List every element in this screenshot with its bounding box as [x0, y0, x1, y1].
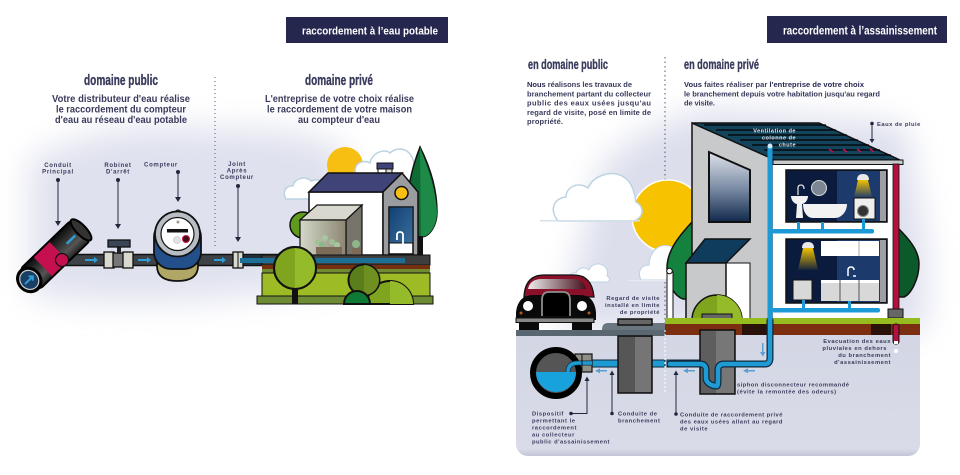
- soil panel: [516, 335, 920, 456]
- lower room: [786, 239, 887, 303]
- arrow: robinet: [115, 178, 121, 229]
- bath: [803, 204, 847, 218]
- background glow: sewer: [560, 110, 925, 330]
- gable: [383, 173, 418, 255]
- text block: domaine public: d'eau au réseau d'eau potable: [55, 115, 187, 126]
- title banner: eau potable: raccordement à l’eau potable: [302, 26, 438, 38]
- text block: public: branchement partant du collecteur: [527, 89, 651, 98]
- heading: en domaine public: en domaine public: [528, 56, 608, 72]
- arrow: joint: [235, 184, 241, 242]
- mirror: [812, 180, 826, 196]
- greenhouse: [346, 205, 362, 255]
- leader: dispositif: [569, 376, 590, 415]
- appliance: [793, 280, 812, 300]
- pipe tee connection: [56, 254, 68, 266]
- lower cabinets: [821, 280, 879, 301]
- arrow: compteur: [175, 170, 181, 202]
- label: ventilation: [753, 128, 796, 148]
- valve: [104, 240, 133, 268]
- text block: privé: le branchement depuis votre habitation jusqu'au regard: [684, 89, 880, 98]
- text block: domaine privé: [265, 94, 414, 126]
- label: robinet d'arrêt: [104, 163, 132, 176]
- label: dispositif: au collecteur: [532, 432, 575, 438]
- small house scene: [240, 147, 437, 304]
- sink: [791, 196, 808, 218]
- joint: [233, 252, 243, 268]
- main pipe: [11, 216, 94, 299]
- vent stack and floor drains: [768, 144, 880, 320]
- label: dispositif: raccordement: [532, 426, 577, 432]
- water pipe: [62, 245, 405, 266]
- lamp: [802, 242, 814, 248]
- round tree: [292, 285, 298, 304]
- flow arrows: [85, 257, 226, 263]
- roof: [309, 173, 402, 192]
- label: eaux de pluie: Eaux de pluie: [877, 122, 921, 128]
- label: robinet d'arrêt: Robinet: [104, 163, 132, 169]
- upper cabinets: [821, 241, 879, 256]
- siphon chamber: [700, 330, 735, 394]
- flow arrows sewer: [595, 343, 766, 373]
- label: joint après compteur: Compteur: [220, 175, 254, 181]
- arrow: eaux de pluie: [870, 122, 874, 143]
- label: ventilation: Ventilation de: [753, 128, 796, 134]
- text block: privé: [684, 80, 880, 108]
- upper room: [786, 170, 887, 222]
- walls: [309, 192, 383, 255]
- label: conduit principal: [42, 163, 74, 176]
- ground: [262, 255, 430, 265]
- text block: public: regard de visite, posé en limite de: [527, 108, 651, 117]
- label: dispositif: Dispositif: [532, 412, 564, 418]
- big cloud: [553, 174, 642, 221]
- text block: domaine public: Votre distributeur d'eau réalise: [52, 94, 190, 105]
- label: conduite de raccordement privé: des eaux usées allant au regard: [680, 420, 783, 426]
- label: siphon: siphon disconnecteur recommandé: [737, 382, 850, 388]
- label: regard de visite: installé en limite: [605, 303, 660, 309]
- label: joint après compteur: Après: [227, 168, 247, 174]
- collector pipe to manhole: [592, 360, 705, 367]
- heading: en domaine privé: en domaine privé: [684, 56, 759, 72]
- label: conduit principal: Conduit: [44, 163, 72, 169]
- interior wall: [772, 160, 894, 320]
- road and pavement: [516, 323, 665, 336]
- car: [516, 275, 596, 330]
- label: dispositif: permettant le: [532, 418, 576, 424]
- label: ventilation: chute: [779, 142, 796, 148]
- cloud behind house: [639, 245, 679, 280]
- siphon and drains: [670, 320, 770, 386]
- annex building: [686, 239, 750, 320]
- left tree: [667, 222, 693, 299]
- heading: domaine public: domaine public: [84, 73, 158, 89]
- text block: public: public des eaux usées jusqu'au: [527, 99, 651, 108]
- big house: [692, 123, 903, 320]
- text block: domaine public: le raccordement du compteur: [56, 104, 186, 116]
- tall tree: [408, 147, 437, 237]
- label: conduit principal: Principal: [42, 170, 74, 176]
- label: evacuation: du branchement: [838, 353, 891, 359]
- label: evacuation: pluviales en dehors: [822, 346, 887, 352]
- washing machine: [854, 198, 875, 219]
- text block: privé: de visite.: [684, 99, 715, 108]
- heading: domaine privé: domaine privé: [305, 73, 373, 89]
- text block: privé: Vous faites réaliser par l'entreprise de votre choix: [684, 80, 865, 89]
- title banner: eau potable: [286, 17, 448, 43]
- bush large: [367, 281, 413, 304]
- text block: public: Nous réalisons les travaux de: [527, 80, 632, 89]
- gutter: [773, 160, 903, 164]
- label: dispositif: public d'assainissement: [532, 440, 610, 446]
- door: [389, 207, 413, 254]
- text block: domaine privé: au compteur d'eau: [298, 115, 380, 126]
- pole: [667, 268, 673, 322]
- label: evacuation: d'assainissement: [834, 360, 891, 366]
- text block: domaine privé: le raccordement de votre maison: [267, 104, 412, 116]
- text block: public: propriété.: [527, 117, 563, 126]
- rain pipe: [893, 164, 899, 310]
- label: conduite de raccordement privé: Conduite de raccordement privé: [680, 412, 783, 418]
- water meter: [154, 210, 201, 281]
- garden ground: [665, 318, 920, 335]
- sun: [632, 180, 704, 252]
- title banner: assainissement: raccordement à l’assainissement: [783, 26, 937, 38]
- label: robinet d'arrêt: D'arrêt: [106, 170, 130, 176]
- label: joint après compteur: Joint: [228, 162, 246, 168]
- cloud left: [284, 178, 325, 199]
- label: compteur: Compteur: [144, 162, 178, 168]
- label: conduite de branchement: Conduite de: [618, 412, 658, 418]
- label: ventilation: colonne de: [762, 136, 796, 142]
- label: regard de visite: de propriété: [620, 310, 660, 316]
- label: siphon: [737, 382, 850, 396]
- right tree: [896, 228, 919, 297]
- label: joint après compteur: [220, 162, 254, 181]
- bush behind house: [290, 212, 316, 238]
- text block: domaine privé: L'entreprise de votre choix réalise: [265, 94, 414, 105]
- label: siphon: (évite la remontée des odeurs): [737, 390, 836, 396]
- manhole: [618, 336, 652, 393]
- label: conduite de branchement: [618, 412, 660, 424]
- label: regard de visite: Regard de visite: [606, 296, 660, 302]
- chimney: [377, 163, 393, 169]
- label: evacuation: Evacuation des eaux: [823, 339, 891, 345]
- faucet: [848, 267, 856, 276]
- small cloud: [569, 264, 609, 282]
- cloud right: [355, 149, 414, 183]
- lamp: [857, 174, 869, 180]
- text block: public: [527, 80, 651, 126]
- label: dispositif: [532, 412, 610, 446]
- bush small: [344, 291, 370, 304]
- title banner: assainissement: [767, 16, 947, 43]
- label: conduite de branchement: branchement: [618, 418, 660, 424]
- bush mid: [348, 264, 380, 296]
- label: regard de visite: [605, 296, 660, 316]
- leader: branchement: [610, 370, 614, 415]
- arrow: conduit principal: [55, 178, 61, 226]
- label: conduite de raccordement privé: de visite: [680, 426, 708, 432]
- background glow: drinking water: [30, 126, 345, 302]
- manhole lid: [618, 319, 652, 325]
- leader: raccordement privé: [674, 370, 678, 416]
- text block: domaine public: [52, 94, 190, 126]
- label: evacuation: [822, 339, 891, 366]
- side wall: [692, 123, 772, 320]
- sun: [327, 147, 363, 183]
- collector: [533, 350, 592, 396]
- storm drain outlet: [893, 324, 899, 353]
- label: conduite de raccordement privé: [680, 412, 783, 432]
- window: [709, 152, 750, 222]
- roof: [692, 123, 900, 160]
